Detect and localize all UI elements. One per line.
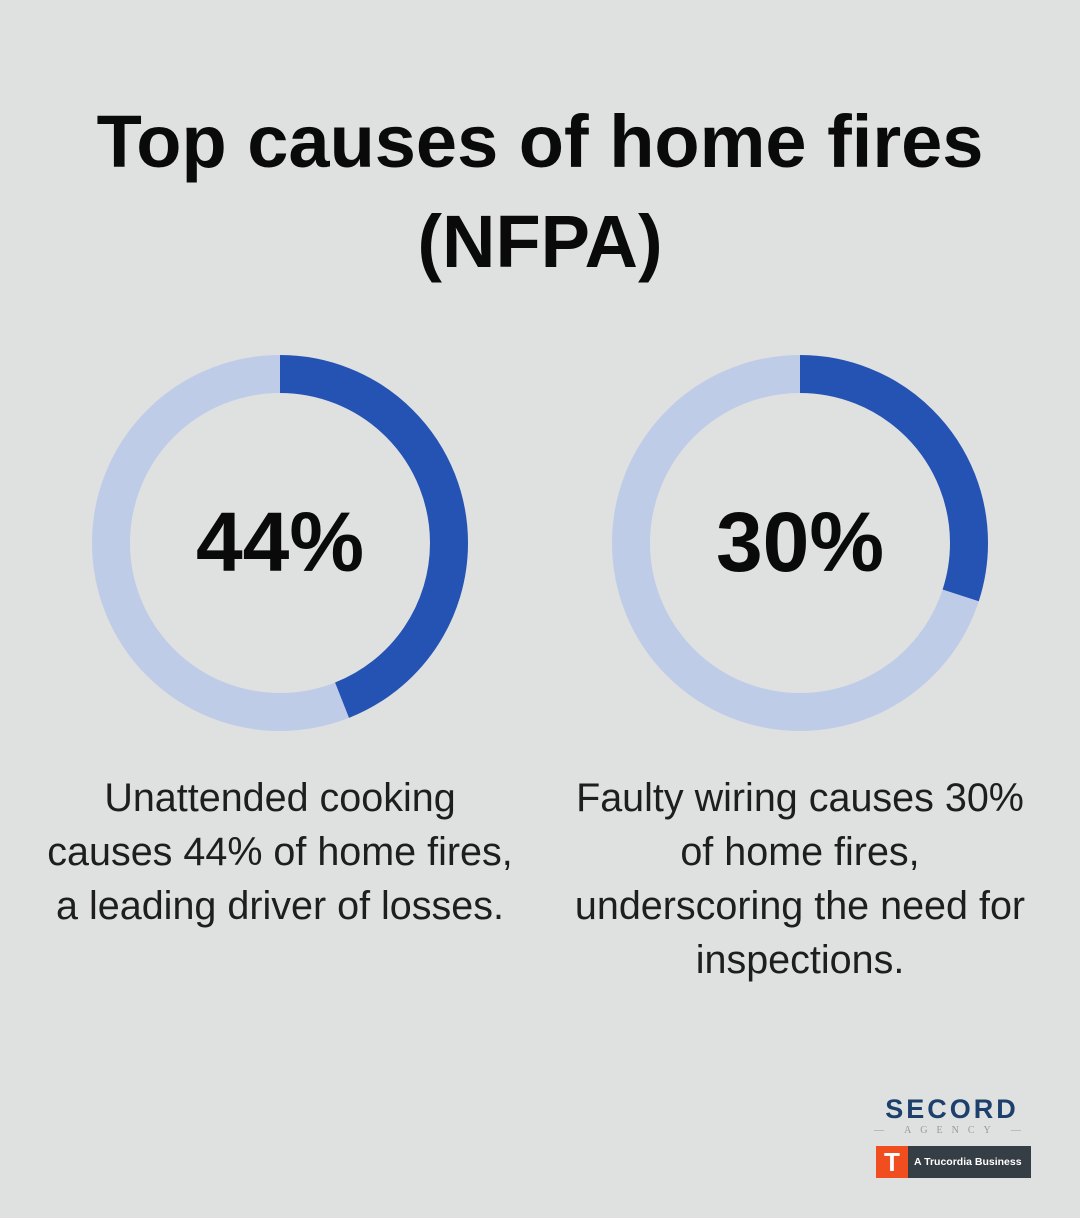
- logo: [874, 1094, 1031, 1178]
- text: wiring: inspections.: [696, 938, 904, 982]
- title: [97, 100, 983, 283]
- text: cooking: a leading driver of losses.: [56, 884, 504, 928]
- text: cooking: Unattended cooking: [104, 776, 456, 820]
- text: wiring: [575, 776, 1025, 982]
- logo: SECORD: [885, 1094, 1019, 1124]
- text: wiring: of home fires,: [680, 830, 920, 874]
- text: cooking: causes 44% of home fires,: [47, 830, 513, 874]
- title: (NFPA): [417, 200, 663, 283]
- logo: T: [884, 1147, 900, 1177]
- donut: 44%: [92, 355, 468, 731]
- text: wiring: Faulty wiring causes 30%: [576, 776, 1024, 820]
- donut: 44%: 44%: [196, 495, 364, 589]
- donut: 30%: [612, 355, 988, 731]
- donut: 30%: 30%: [716, 495, 884, 589]
- text: cooking: [47, 776, 513, 928]
- logo: A Trucordia Business: [914, 1156, 1022, 1168]
- text: wiring: underscoring the need for: [575, 884, 1025, 928]
- title: Top causes of home fires: [97, 100, 983, 183]
- logo: — AGENCY —: [874, 1125, 1030, 1136]
